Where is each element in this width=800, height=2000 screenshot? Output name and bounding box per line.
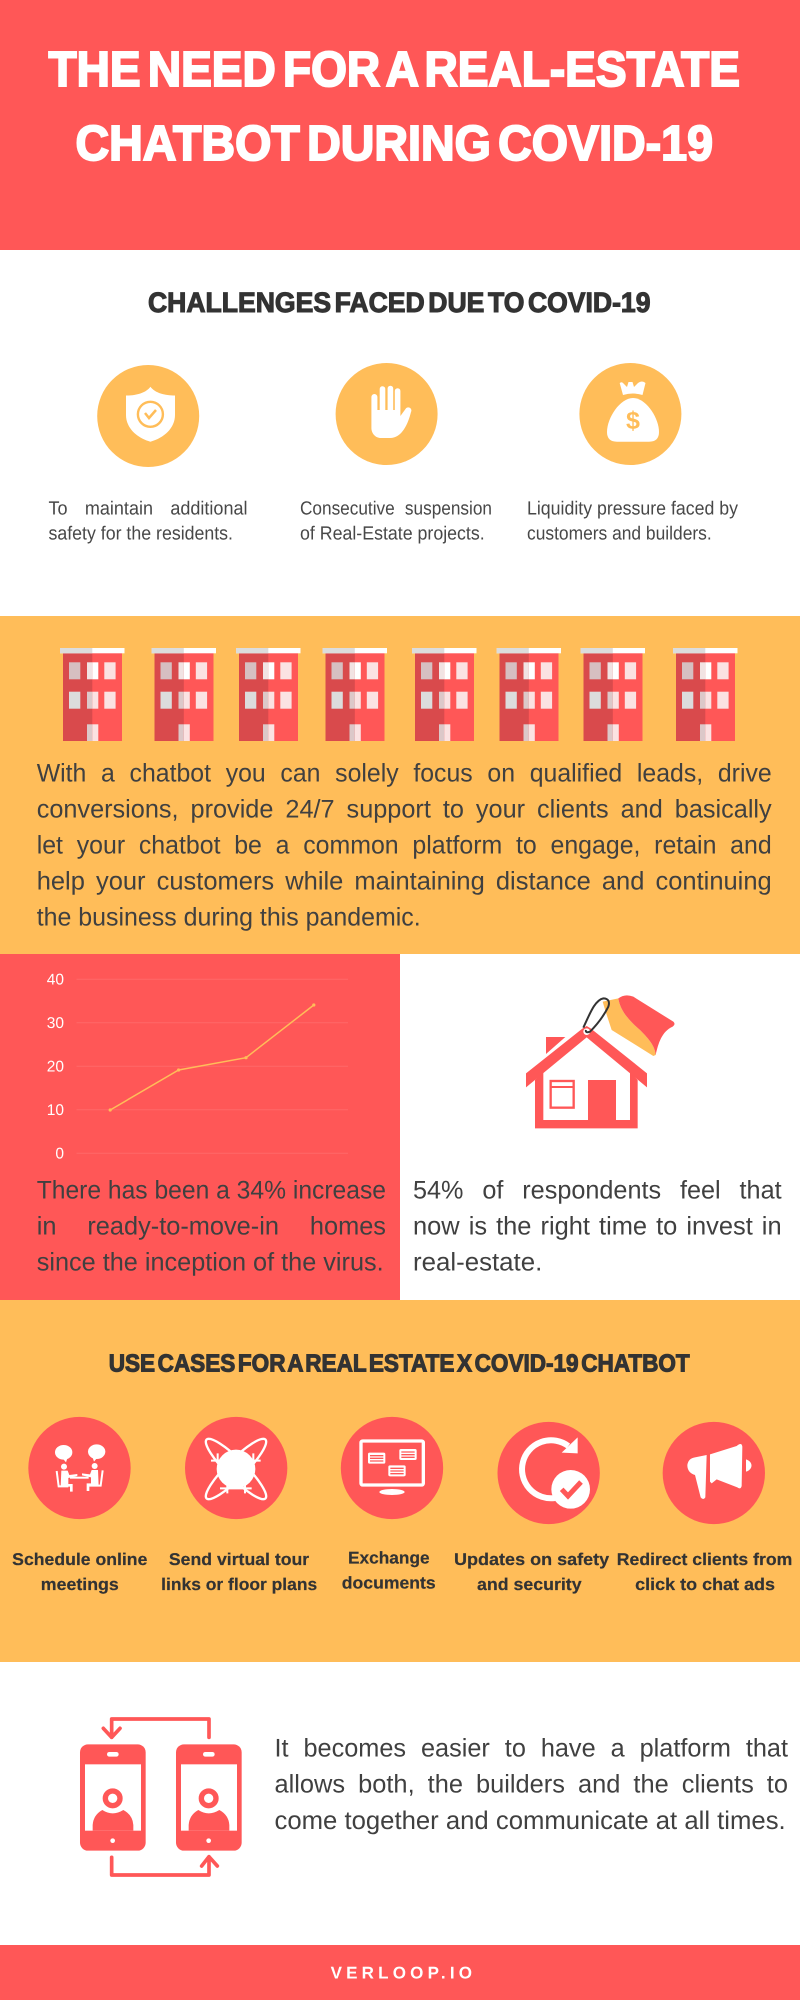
text: respondents stat: real-estate. — [413, 1248, 542, 1276]
text: suspension caption: of Real-Estate projects. — [300, 524, 485, 545]
icon: virtual tour — [185, 1417, 287, 1519]
icon: house with tag — [526, 995, 675, 1128]
text: virtual tour: Send virtual tour — [169, 1550, 310, 1569]
text: schedule meetings: Schedule online — [12, 1550, 147, 1569]
text: safety updates: and security — [477, 1575, 582, 1594]
icon row: buildings — [60, 648, 738, 741]
text: safety caption: safety for the residents. — [48, 524, 233, 545]
text: exchange documents: documents — [342, 1573, 436, 1592]
text: respondents stat — [413, 1176, 782, 1276]
panel: respondents stat — [400, 954, 800, 1300]
text: chatbot paragraph: conversions, provide 24/7 support to your clients and basically — [37, 796, 772, 824]
line chart: 10 — [47, 1102, 64, 1119]
icon: stop hand — [336, 363, 438, 465]
text: brand: VERLOOP.IO — [331, 1964, 472, 1983]
icon: safety shield — [97, 365, 199, 467]
text: chatbot paragraph: With a chatbot you can solely focus on qualified leads, drive — [37, 760, 772, 788]
text: liquidity caption — [527, 499, 738, 545]
text: suspension caption — [300, 499, 492, 545]
title: THE NEED FOR A REAL-ESTATE — [48, 42, 740, 97]
text: chatbot paragraph: help your customers while maintaining distance and continuing — [37, 868, 772, 896]
heading: challenges: CHALLENGES FACED DUE TO COVID-19 — [148, 287, 650, 318]
text: platform paragraph — [274, 1735, 788, 1835]
line chart: 0 — [55, 1146, 64, 1162]
text: respondents stat: 54% of respondents feel that — [413, 1176, 782, 1204]
panel: home increase stat — [0, 954, 400, 1300]
text: increase stat — [37, 1176, 386, 1276]
text: increase stat: in ready-to-move-in homes — [37, 1212, 386, 1240]
panel: use cases — [0, 1300, 800, 1662]
text: platform paragraph: come together and communicate at all times. — [274, 1807, 786, 1835]
line chart: 30 — [47, 1015, 64, 1032]
text: platform paragraph: It becomes easier to have a platform that — [274, 1735, 788, 1763]
icon: megaphone — [663, 1422, 765, 1524]
icon: safety updates — [497, 1422, 600, 1524]
text: chatbot paragraph: the business during this pandemic. — [37, 904, 421, 932]
icon: money bag — [579, 363, 681, 465]
panel: communication — [0, 1662, 800, 1945]
title: CHATBOT DURING COVID-19 — [76, 116, 713, 171]
text: schedule meetings: meetings — [41, 1575, 119, 1594]
text: increase stat: There has been a 34% increase — [37, 1176, 386, 1204]
line chart — [47, 972, 348, 1162]
heading: use cases: USE CASES FOR A REAL ESTATE X COVID-19 CHATBOT — [109, 1351, 690, 1378]
text: safety updates — [454, 1550, 610, 1594]
panel: footer — [0, 1945, 800, 2000]
panel: chatbot benefits — [0, 616, 800, 954]
text: liquidity caption: customers and builders. — [527, 524, 712, 545]
text: virtual tour: links or floor plans — [161, 1575, 317, 1594]
icon: phones exchanging — [80, 1719, 242, 1875]
text: platform paragraph: allows both, the builders and the clients to — [274, 1771, 788, 1799]
line chart: 20 — [47, 1058, 64, 1076]
title — [48, 42, 740, 171]
icon: money bag: $ — [626, 407, 640, 435]
text: safety updates: Updates on safety — [454, 1550, 610, 1569]
icon: documents monitor — [341, 1417, 443, 1519]
text: liquidity caption: Liquidity pressure faced by — [527, 499, 738, 520]
text: redirect clients: Redirect clients from — [617, 1550, 792, 1569]
text: respondents stat: now is the right time to invest in — [413, 1212, 782, 1240]
text: chatbot paragraph: let your chatbot be a common platform to engage, retain and — [37, 832, 772, 860]
icon: online meeting — [28, 1417, 131, 1519]
text: chatbot paragraph — [37, 760, 772, 932]
panel: header — [0, 0, 800, 250]
text: exchange documents — [342, 1548, 436, 1592]
text: suspension caption: Consecutive suspension — [300, 499, 492, 520]
panel: challenges — [0, 250, 800, 616]
line chart: 40 — [47, 972, 64, 988]
text: virtual tour — [161, 1550, 317, 1594]
text: redirect clients: click to chat ads — [635, 1575, 775, 1594]
text: increase stat: since the inception of the virus. — [37, 1248, 384, 1276]
text: redirect clients — [617, 1550, 792, 1594]
text: schedule meetings — [12, 1550, 147, 1594]
text: safety caption: To maintain additional — [48, 499, 248, 520]
text: exchange documents: Exchange — [348, 1548, 430, 1567]
text: safety caption — [48, 499, 248, 545]
